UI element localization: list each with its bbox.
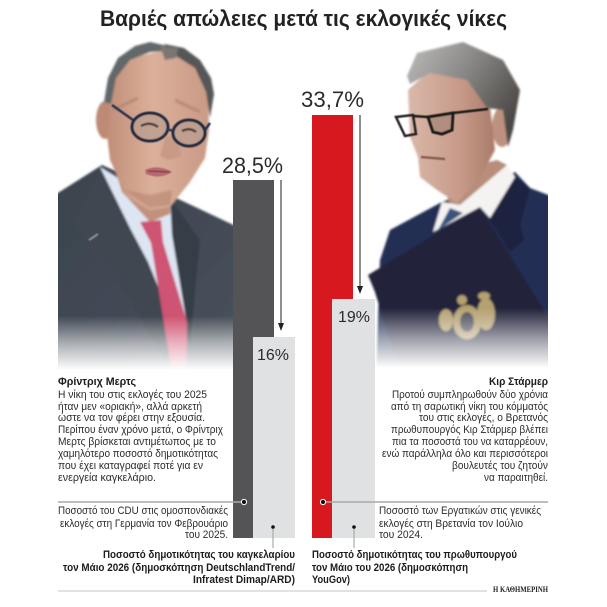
photo: Keir Starmer — [366, 40, 548, 366]
hair — [407, 42, 520, 147]
text block: Starmer — [382, 376, 549, 484]
value: 33,7%: 33,7% — [301, 87, 364, 112]
callout: chancellor popularity: Infratest Dimap/ARD) — [193, 574, 295, 586]
text block: Starmer: από τη σαρωτική νίκη του κόμματός — [391, 401, 548, 413]
text block: Merz: Περίπου έναν χρόνο μετά, ο Φρίντριχ — [58, 424, 223, 436]
text block: Merz: ώστε να τον φέρει στην εξουσία. — [58, 412, 205, 424]
callout: prime minister popularity — [312, 525, 517, 586]
text block: Starmer: του στις εκλογές, ο Βρετανός — [419, 412, 548, 424]
callout: Labour share: του 2024. — [379, 529, 423, 541]
neck — [116, 175, 172, 223]
lower face shadow — [125, 190, 172, 208]
text block: Starmer: Κιρ Στάρμερ — [489, 376, 548, 388]
value: 16%: 16% — [257, 347, 289, 364]
mouth — [421, 157, 445, 159]
fold — [113, 98, 200, 112]
title: Βαριές απώλειες μετά τις εκλογικές νίκες — [100, 6, 507, 31]
text block: Merz: ήταν μεν «οριακή», αλλά αρκετή — [58, 401, 202, 413]
bar: chancellor popularity 16% — [253, 337, 295, 538]
credit: Kathimerini: Η ΚΑΘΗΜΕΡΙΝΗ — [493, 584, 548, 594]
coat of arms — [439, 292, 495, 339]
callout: prime minister popularity: YouGov) — [312, 574, 350, 586]
shirt — [98, 166, 188, 318]
text block: Starmer: πρωθυπουργός Κιρ Στάρμερ βλέπει — [391, 424, 548, 436]
callout: chancellor popularity: Ποσοστό δημοτικότητας του καγκελαρίου — [103, 549, 295, 561]
callout: chancellor popularity: τον Μάιο 2026 (δημοσκόπηση DeutschlandTrend/ — [63, 562, 295, 574]
callout: CDU share: εκλογές στη Γερμανία τον Φεβρουάριο — [60, 518, 228, 530]
bar: Labour 33,7% — [312, 115, 353, 538]
nose — [160, 136, 180, 160]
text block: Merz: που έχει καταγραφεί ποτέ για εν — [58, 460, 203, 472]
fade — [58, 318, 233, 369]
callout: Labour share: Ποσοστό των Εργατικών στις γενικές — [379, 505, 541, 517]
lapel pin — [89, 234, 98, 240]
fade — [375, 310, 548, 367]
ear — [492, 107, 512, 147]
tie — [140, 220, 187, 372]
tie — [438, 208, 463, 230]
glasses — [396, 115, 416, 136]
text block: Starmer: ενώ παράλληλα όλο και περισσότεροι — [382, 448, 548, 460]
text block: Merz: Μερτς βρίσκεται αντιμέτωπος με το — [58, 436, 216, 448]
value: 19%: 19% — [338, 309, 370, 326]
eyes — [141, 124, 196, 132]
callout: CDU share — [58, 499, 247, 541]
callout: prime minister popularity: τον Μάιο του 2026 (δημοσκόπηση — [312, 562, 468, 574]
callout: Labour share — [320, 499, 548, 541]
suit — [376, 170, 548, 366]
head — [107, 50, 209, 210]
ear — [96, 101, 114, 139]
suit — [58, 164, 233, 368]
arrow: decline — [278, 180, 284, 331]
photo: Friedrich Merz — [58, 40, 233, 368]
text block: Merz: ενεργεία καγκελάριο. — [58, 472, 156, 484]
callout: CDU share: Ποσοστό του CDU στις ομοσπονδιακές — [58, 505, 228, 517]
bar chart: Merz — [222, 153, 295, 538]
text block: Starmer: να παραιτηθεί. — [484, 472, 548, 484]
callout: chancellor popularity — [63, 525, 295, 586]
callout: prime minister popularity: Ποσοστό δημοτικότητας του πρωθυπουργού — [312, 549, 517, 561]
mouth — [145, 167, 172, 177]
callout: Labour share: εκλογές στη Βρετανία τον Ιούλιο — [379, 518, 523, 530]
folder — [366, 208, 548, 346]
neck — [440, 160, 507, 205]
text block: Merz — [58, 376, 223, 484]
text block: Starmer: πια τα ποσοστά του να καταρρέουν, — [392, 436, 548, 448]
callout: CDU share: του 2025. — [185, 529, 228, 541]
arrow: decline — [357, 115, 363, 294]
bar: PM popularity 19% — [332, 299, 375, 538]
text block: Starmer: βουλευτές του ζητούν — [452, 460, 548, 472]
value: 28,5%: 28,5% — [222, 153, 283, 178]
text block: Merz: χαμηλότερο ποσοστό δημοτικότητας — [58, 448, 218, 460]
head — [408, 70, 495, 203]
text block: Merz: Η νίκη του στις εκλογές του 2025 — [58, 389, 207, 401]
glasses — [132, 113, 168, 141]
text block: Starmer: Προτού συμπληρωθούν δύο χρόνια — [392, 389, 549, 401]
text block: Merz: Φρίντριχ Μερτς — [58, 376, 136, 388]
shirt — [433, 165, 515, 232]
bar: CDU 28,5% — [233, 180, 274, 538]
hair — [104, 42, 178, 104]
bar chart: Starmer — [301, 87, 375, 538]
